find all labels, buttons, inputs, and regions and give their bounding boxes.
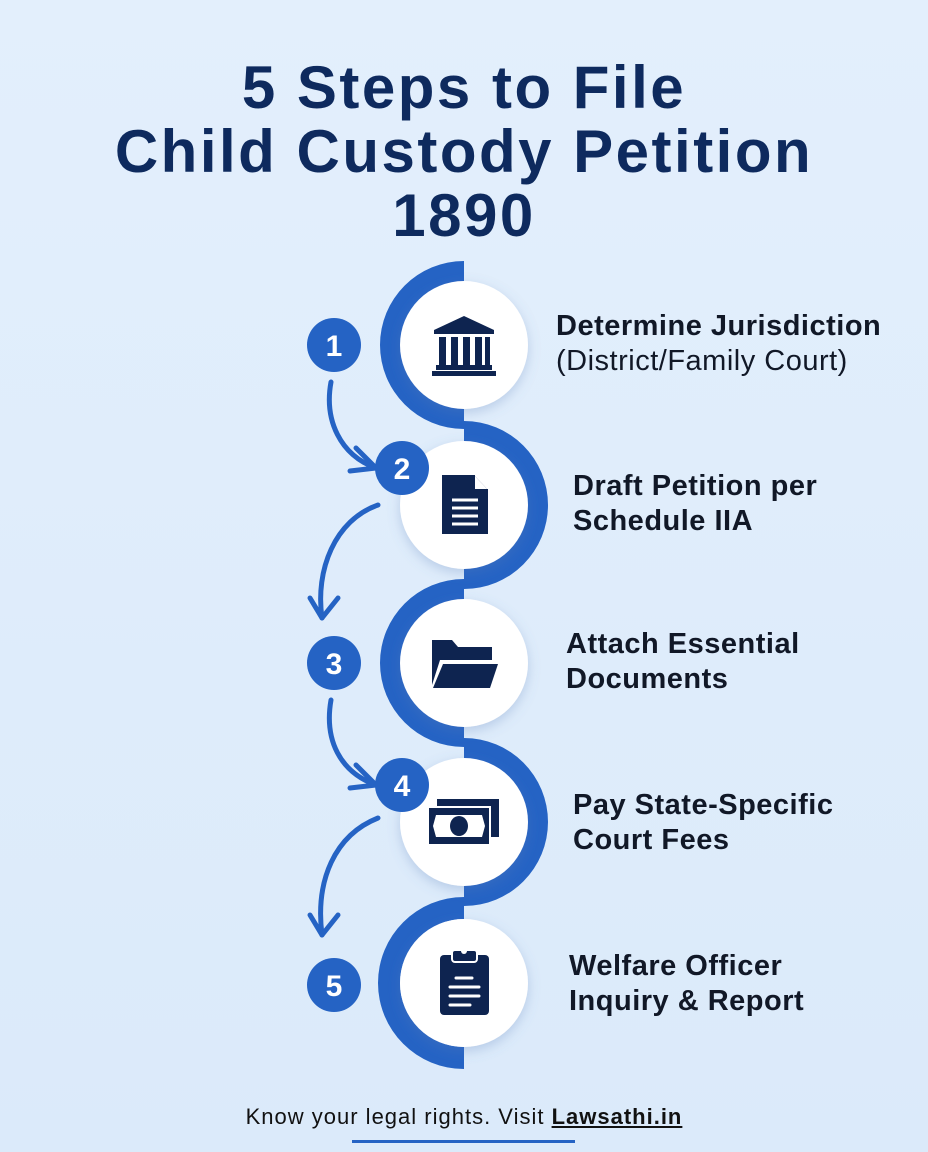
step 5 text: Welfare Officer xyxy=(569,950,782,982)
step 1 text: (District/Family Court) xyxy=(556,345,848,377)
title: 1890 xyxy=(392,182,536,249)
step 3 text: Documents xyxy=(566,663,728,695)
title: 5 Steps to File xyxy=(242,54,686,121)
title xyxy=(115,54,813,249)
footer: Know your legal rights. Visit Lawsathi.in xyxy=(246,1104,682,1129)
footer xyxy=(246,1104,682,1143)
icon: money xyxy=(428,799,499,845)
step circles xyxy=(400,281,528,1047)
step 2 text xyxy=(573,470,817,537)
step 5 text xyxy=(569,950,804,1017)
step 5 text: Inquiry & Report xyxy=(569,985,804,1017)
step 2 text: Schedule IIA xyxy=(573,505,753,537)
icon: folder xyxy=(432,640,498,688)
step 1 text: Determine Jurisdiction xyxy=(556,310,881,342)
number badges: 4 xyxy=(394,770,411,803)
number badges: 2 xyxy=(394,453,410,486)
icon: document xyxy=(442,475,488,534)
step 4 text xyxy=(573,789,833,856)
arrows xyxy=(310,382,378,935)
number badges xyxy=(307,318,429,1012)
step 1 text xyxy=(556,310,881,377)
icon: courthouse xyxy=(432,316,496,376)
number badges: 3 xyxy=(326,648,342,681)
step 2 text: Draft Petition per xyxy=(573,470,817,502)
step 3 text xyxy=(566,628,800,695)
title: Child Custody Petition xyxy=(115,118,813,185)
snake rings xyxy=(378,261,548,1069)
number badges: 5 xyxy=(326,970,342,1003)
icon: clipboard xyxy=(440,948,489,1015)
step 4 text: Pay State-Specific xyxy=(573,789,833,821)
step 4 text: Court Fees xyxy=(573,824,729,856)
number badges: 1 xyxy=(326,330,342,363)
step 3 text: Attach Essential xyxy=(566,628,800,660)
